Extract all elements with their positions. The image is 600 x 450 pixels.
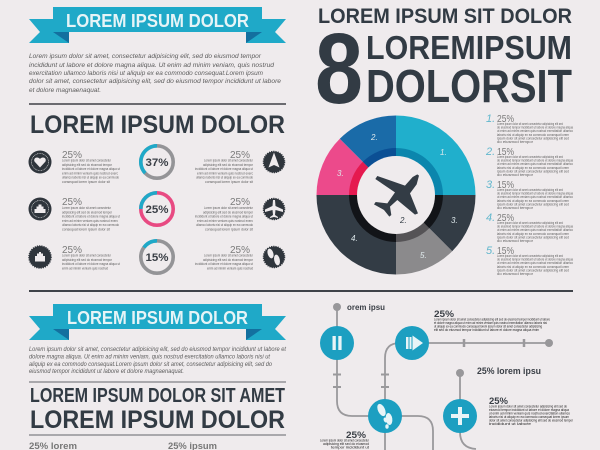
- callout: plus 25%: dolor sit amet consectetur adipisicing elit sed do eiusmod tempor: [489, 418, 574, 422]
- title: right column: DOLORSIT: [366, 60, 572, 112]
- stat: left row 3: Lorem ipsum dolor sit amet consectetur: [62, 254, 112, 258]
- stat: left row 2: [62, 197, 120, 232]
- stat: left row 3: enim ad minim veniam quis nostrud: [62, 266, 108, 270]
- callout: plus 25%: eiusmod tempor incididunt ut labore et dolore magna aliqua: [489, 408, 569, 412]
- list item 3: 3.: [486, 179, 495, 191]
- stat: right row 3: adipisicing elit sed do eiusmod tempor: [203, 258, 254, 262]
- list item 2: 15%: [497, 147, 514, 158]
- list item 1: do eiusmod tempor incididunt ut labore et dolore magna aliqua: [497, 126, 573, 130]
- list item 5: laboris nisi ut aliquip ex ea commodo consequat lorem: [497, 265, 569, 269]
- stat: left row 2: Lorem ipsum dolor sit amet consectetur: [62, 206, 112, 210]
- callout: foot 25%: [320, 430, 370, 450]
- text block: intro paragraph: [29, 54, 282, 94]
- stat: right row 1: [195, 150, 254, 184]
- donut chart: airplane: [316, 116, 476, 274]
- stat: left row 2: incididunt ut labore et dolore magna aliqua ut: [62, 215, 120, 219]
- ribbon banner: lower left: [29, 304, 286, 340]
- list item 1: 1.: [486, 113, 495, 125]
- stat: left row 2: 25%: [62, 197, 82, 208]
- title: right column: [315, 5, 572, 125]
- stat: right row 3: enim ad minim veniam quis nostrud: [207, 266, 253, 270]
- flow diagram: end dot play: [545, 339, 553, 347]
- list item 2: do eiusmod tempor: [497, 173, 534, 177]
- list item 1: Lorem ipsum dolor sit amet consectetur adipisicing elit sed: [497, 122, 563, 126]
- segment labels: [337, 133, 458, 260]
- stat: left row 3: 25%: [62, 245, 82, 256]
- callout: foot 25%: adipisicing elit sed do eiusmod: [323, 442, 369, 446]
- stat: right row 1: Lorem ipsum dolor sit amet consectetur: [204, 158, 254, 162]
- title: right column: LOREM IPSUM SIT DOLOR: [318, 5, 572, 28]
- list item 5: 5.: [486, 245, 495, 257]
- stat: left row 1: Lorem ipsum dolor sit amet consectetur: [62, 158, 112, 162]
- text block: intro paragraph: et dolore magnaenaquat.: [29, 88, 101, 94]
- list: percentages right of donut: [485, 113, 573, 276]
- list item 2: Lorem ipsum dolor sit amet consectetur adipisicing elit sed: [497, 155, 563, 159]
- stat: right row 1: enim ad minim veniam quis nostrud exerc: [197, 171, 253, 175]
- segment labels: 2.: [399, 216, 407, 225]
- text block: intro paragraph: Lorem ipsum dolor sit amet, consectetur adipisicing elit, sed do eiusmod tempor: [29, 54, 262, 60]
- text block: lower paragraph: [29, 347, 286, 375]
- stat: left row 1: [62, 150, 120, 184]
- stat: right row 1: adipisicing elit sed do eiusmod tempor: [203, 163, 254, 167]
- stat: right row 2: incididunt ut labore et dolore magna aliqua ut: [195, 215, 253, 219]
- heading: lower section line 2: LOREM IPSUM DOLOR: [30, 406, 285, 434]
- ribbon banner: top left: LOREM IPSUM DOLOR: [66, 11, 249, 31]
- callout: plus 25%: laboris nisi ut aliquip ex ea commodo consequat lorem ipsum: [489, 415, 569, 419]
- list item 5: ut enim ad minim veniam quis nostrud exercitation ullamco: [497, 261, 573, 265]
- list item 5: 15%: [497, 246, 514, 257]
- list item 2: 2.: [485, 146, 495, 158]
- title: right column: 8: [315, 13, 363, 125]
- stat: right row 3: incididunt ut labore et dolore magna aliqua ut: [195, 262, 253, 266]
- stat: right row 2: ullamco laboris nisi ut aliquip ex ea commodo: [196, 223, 253, 227]
- segment labels: 2.: [370, 133, 378, 142]
- stat: right row 2: consequat lorem ipsum dolor sit: [205, 228, 253, 232]
- list item 5: ipsum dolor sit amet consectetur adipisicing elit sed: [497, 268, 569, 272]
- label: orem ipsu: orem ipsu: [347, 303, 385, 312]
- icon: heart badge: [28, 150, 52, 174]
- text block: intro paragraph: incididunt ut labore et dolore magna aliqua. Ut enim ad minim veniam, quis nostrud: [29, 63, 275, 69]
- list item 1: ut enim ad minim veniam quis nostrud exercitation ullamco: [497, 129, 573, 133]
- callout: plus 25%: incididunt ut labore: [489, 422, 531, 426]
- list item 1: [486, 113, 573, 144]
- stat: left row 3: [62, 245, 120, 270]
- text block: lower paragraph: aliquip ex ea commodo consequat.Lorem ipsum dolor sit amet, consectetur adipisicing elit, sed do: [29, 362, 273, 368]
- ring chart: 37%: 37%: [146, 157, 169, 169]
- list item 5: do eiusmod tempor incididunt ut labore et dolore magna aliqua: [497, 258, 573, 262]
- list item 4: laboris nisi ut aliquip ex ea commodo consequat lorem: [497, 232, 569, 236]
- segment labels: 1.: [440, 148, 447, 157]
- callout: plus 25%: 25%: [489, 396, 509, 407]
- list item 3: laboris nisi ut aliquip ex ea commodo consequat lorem: [497, 199, 569, 203]
- text block: lower paragraph: dolore magna aliqua. Ut enim ad minim veniam, quis nostrud exercitation ullamco laboris nisi ut: [29, 354, 270, 360]
- stat: left row 2: ullamco laboris nisi ut aliquip ex ea commodo: [62, 223, 119, 227]
- icon: play button: [395, 326, 429, 360]
- list item 2: ut enim ad minim veniam quis nostrud exercitation ullamco: [497, 162, 573, 166]
- heading: stats section: LOREM IPSUM DOLOR: [30, 111, 285, 139]
- callout: plus 25%: Lorem ipsum dolor sit amet consectetur adipisicing elit sed do: [489, 404, 567, 408]
- heading: lower section line 1: LOREM IPSUM DOLOR SIT AMET: [30, 385, 285, 407]
- list item 4: ipsum dolor sit amet consectetur adipisicing elit sed: [497, 235, 569, 239]
- icon: airplane badge: [264, 198, 284, 220]
- list item 4: do eiusmod tempor incididunt ut labore et dolore magna aliqua: [497, 225, 573, 229]
- stat: left row 1: consequat lorem ipsum dolor sit: [62, 180, 110, 184]
- icon: gift badge: [29, 246, 51, 268]
- stat: right row 2: 25%: [230, 197, 250, 208]
- ring chart: 25%: [141, 193, 173, 225]
- callout: play 25%: 25%: [434, 309, 455, 320]
- list item 3: 15%: [497, 180, 514, 191]
- ribbon banner: top left: [29, 7, 286, 43]
- label: 25% lorem ipsu: 25% lorem ipsu: [477, 366, 541, 376]
- stat: left row 1: ullamco laboris nisi ut aliquip ex ea commodo: [62, 176, 119, 180]
- list item 4: do eiusmod tempor: [497, 239, 534, 243]
- callout: foot 25%: tempor incididunt ut: [331, 446, 369, 450]
- list item 1: 25%: [497, 114, 514, 125]
- stat: right row 2: Lorem ipsum dolor sit amet consectetur: [204, 206, 254, 210]
- icon: footprints badge: [264, 246, 284, 268]
- text block: lower paragraph: eiusmod tempor incididunt ut labore et dolore magnaenaquat.: [29, 369, 184, 375]
- segment labels: 3.: [337, 169, 344, 178]
- list item 2: laboris nisi ut aliquip ex ea commodo consequat lorem: [497, 166, 569, 170]
- list item 2: do eiusmod tempor incididunt ut labore et dolore magna aliqua: [497, 159, 573, 163]
- list item 4: 25%: [497, 213, 514, 224]
- stat: left row 2: enim ad minim veniam quis nostrud exerc: [62, 219, 118, 223]
- icon: rocket badge: [264, 152, 284, 172]
- stat: right row 2: adipisicing elit sed do eiusmod tempor: [203, 210, 254, 214]
- stat: right row 1: 25%: [230, 150, 250, 161]
- list item 2: ipsum dolor sit amet consectetur adipisicing elit sed: [497, 169, 569, 173]
- ring chart: 15%: [141, 241, 173, 273]
- list item 5: [486, 245, 573, 276]
- list item 4: Lorem ipsum dolor sit amet consectetur adipisicing elit sed: [497, 221, 563, 225]
- list item 5: Lorem ipsum dolor sit amet consectetur adipisicing elit sed: [497, 254, 563, 258]
- ribbon banner: lower left: LOREM IPSUM DOLOR: [67, 308, 248, 328]
- icon: cake badge: [28, 198, 52, 220]
- list item 3: Lorem ipsum dolor sit amet consectetur adipisicing elit sed: [497, 188, 563, 192]
- list item 3: ut enim ad minim veniam quis nostrud exercitation ullamco: [497, 195, 573, 199]
- segment labels: 5.: [420, 251, 427, 260]
- icon: footprints button: [368, 399, 402, 433]
- stat: left row 3: incididunt ut labore et dolore magna aliqua ut: [62, 262, 120, 266]
- flow diagram: end dot pause: [333, 303, 341, 311]
- stat: left row 1: 25%: [62, 150, 82, 161]
- stat: left row 1: enim ad minim veniam quis nostrud exerc: [62, 171, 118, 175]
- stat: right row 1: ullamco laboris nisi ut aliquip ex ea commodo: [196, 176, 253, 180]
- callout: plus 25%: ut enim ad minim veniam quis nostrud exercitation ullamco: [489, 412, 570, 416]
- stat: right row 2: [195, 197, 254, 232]
- text block: lower paragraph: Lorem ipsum dolor sit amet, consectetur adipisicing elit, sed do eiusmod tempor incididunt ut labore et: [29, 347, 286, 353]
- list item 4: 4.: [486, 212, 495, 224]
- segment labels: 3.: [451, 216, 458, 225]
- list item 1: do eiusmod tempor: [497, 140, 534, 144]
- callout: foot 25%: 25%: [346, 430, 367, 441]
- segment labels: 4.: [351, 234, 358, 243]
- callout: play 25%: ut aliquip ex ea commodo consequat lorem ipsum dolor sit amet consectetur adipisicing: [434, 324, 542, 328]
- list item 3: do eiusmod tempor incididunt ut labore et dolore magna aliqua: [497, 192, 573, 196]
- stat: left row 2: consequat lorem ipsum dolor sit: [62, 228, 110, 232]
- stat: right row 1: consequat lorem ipsum dolor sit: [205, 180, 253, 184]
- title: right column: LOREMIPSUM: [366, 29, 572, 66]
- callout: play 25%: elit sed do eiusmod tempor incididunt ut labore et dolore magna aliqua enim: [434, 328, 539, 332]
- stat: right row 3: Lorem ipsum dolor sit amet consectetur: [204, 254, 254, 258]
- stat: left row 2: adipisicing elit sed do eiusmod tempor: [62, 210, 113, 214]
- ring chart: 15%: 15%: [146, 252, 169, 264]
- stat: right row 3: 25%: [230, 245, 250, 256]
- callout: play 25%: Lorem ipsum dolor sit amet consectetur adipisicing elit sed do eiusmod tempor incididunt ut labore: [434, 318, 550, 322]
- list item 5: do eiusmod tempor: [497, 272, 534, 276]
- callout: plus 25%: [489, 396, 574, 426]
- stat: right row 2: enim ad minim veniam quis nostrud exerc: [197, 219, 253, 223]
- icon: airplane: [374, 174, 419, 217]
- flow diagram: end dot plus: [456, 369, 464, 377]
- list item 1: ipsum dolor sit amet consectetur adipisicing elit sed: [497, 136, 569, 140]
- list item 4: ut enim ad minim veniam quis nostrud exercitation ullamco: [497, 228, 573, 232]
- stat: left row 3: adipisicing elit sed do eiusmod tempor: [62, 258, 113, 262]
- stat: right row 1: incididunt ut labore et dolore magna aliqua ut: [195, 167, 253, 171]
- callout: play 25%: [434, 309, 550, 332]
- stat: left row 1: incididunt ut labore et dolore magna aliqua ut: [62, 167, 120, 171]
- list item 3: do eiusmod tempor: [497, 206, 534, 210]
- callout: foot 25%: Lorem ipsum dolor sit amet consectetur: [320, 438, 370, 442]
- stat: right row 3: [195, 245, 254, 270]
- icon: plus button: [443, 399, 477, 433]
- list item 4: [486, 212, 573, 243]
- ring chart: 25%: 25%: [146, 204, 169, 216]
- list item 3: ipsum dolor sit amet consectetur adipisicing elit sed: [497, 202, 569, 206]
- callout: play 25%: et dolore magna aliqua ut enim ad minim veniam quis nostrud exercitation ullamco laboris nisi: [434, 321, 547, 325]
- text block: intro paragraph: exercitation ullamco laboris nisi ut aliquip ex ea commodo consequat.Lorem ipsum: [29, 71, 263, 77]
- flow diagram: connectors: [333, 307, 549, 450]
- text block: intro paragraph: dolor sit amet, consectetur adipisicing elit, sed do eiusmod tempor incididunt ut labore: [29, 79, 282, 85]
- icon: pause button: [320, 326, 354, 360]
- stat: left row 1: adipisicing elit sed do eiusmod tempor: [62, 163, 113, 167]
- ring chart: 37%: [141, 146, 173, 178]
- list item 2: [485, 146, 573, 177]
- list item 3: [486, 179, 573, 210]
- list item 1: laboris nisi ut aliquip ex ea commodo consequat lorem: [497, 133, 569, 137]
